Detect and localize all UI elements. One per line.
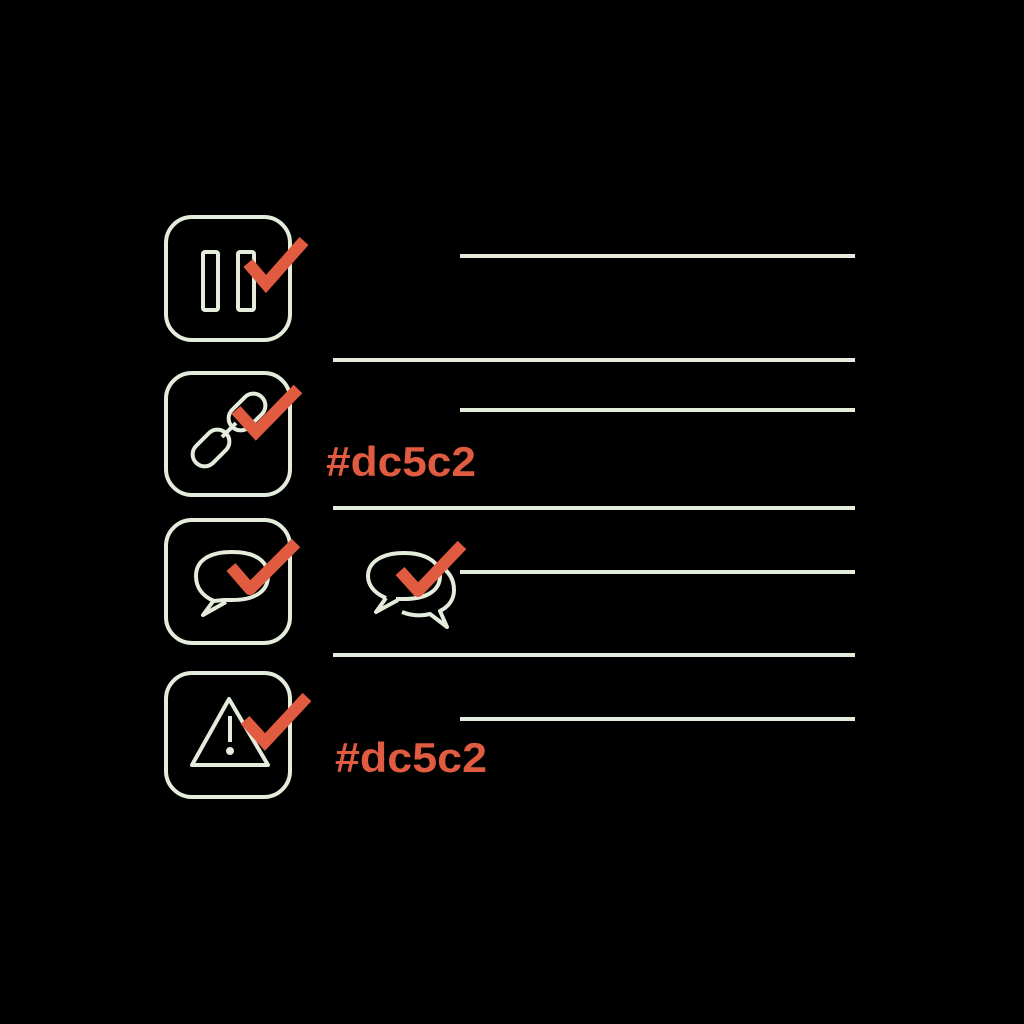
icon: pause box: [166, 217, 304, 340]
icon: warning box: [166, 673, 307, 797]
label: hex text 1: #dc5c2: [326, 438, 476, 485]
icon: double speech bubble: [368, 545, 462, 627]
icon: speech bubble box: [166, 520, 296, 643]
label: hex text 2: #dc5c2: [335, 734, 487, 781]
icon: chain link box: [166, 373, 298, 495]
